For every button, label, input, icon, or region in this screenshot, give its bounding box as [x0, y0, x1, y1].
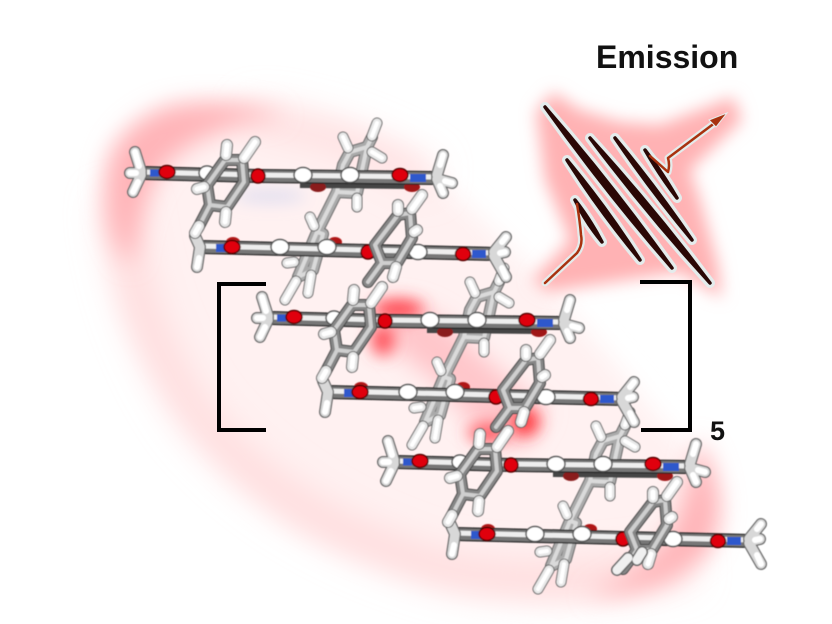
molecular stack: [130, 123, 761, 589]
molecule 1: [130, 152, 452, 193]
back phenyl chains: [285, 123, 635, 589]
molecule 5: [383, 441, 705, 482]
molecule 2: [195, 236, 506, 277]
glow: large pink halo: [106, 103, 719, 600]
arrow head: [709, 113, 727, 127]
molecule 3: [257, 297, 579, 338]
molecule 4: [323, 381, 634, 422]
glow: central red band: [234, 190, 545, 450]
repeat count: 5: [710, 416, 725, 446]
glow: emission: [532, 92, 742, 298]
right bracket: [640, 282, 690, 430]
icon: emission wave packet: [545, 107, 727, 283]
title: Emission: Emission: [596, 39, 738, 75]
molecule 6: [450, 523, 761, 564]
front phenyl rings: [195, 142, 677, 570]
left bracket: [219, 284, 266, 430]
